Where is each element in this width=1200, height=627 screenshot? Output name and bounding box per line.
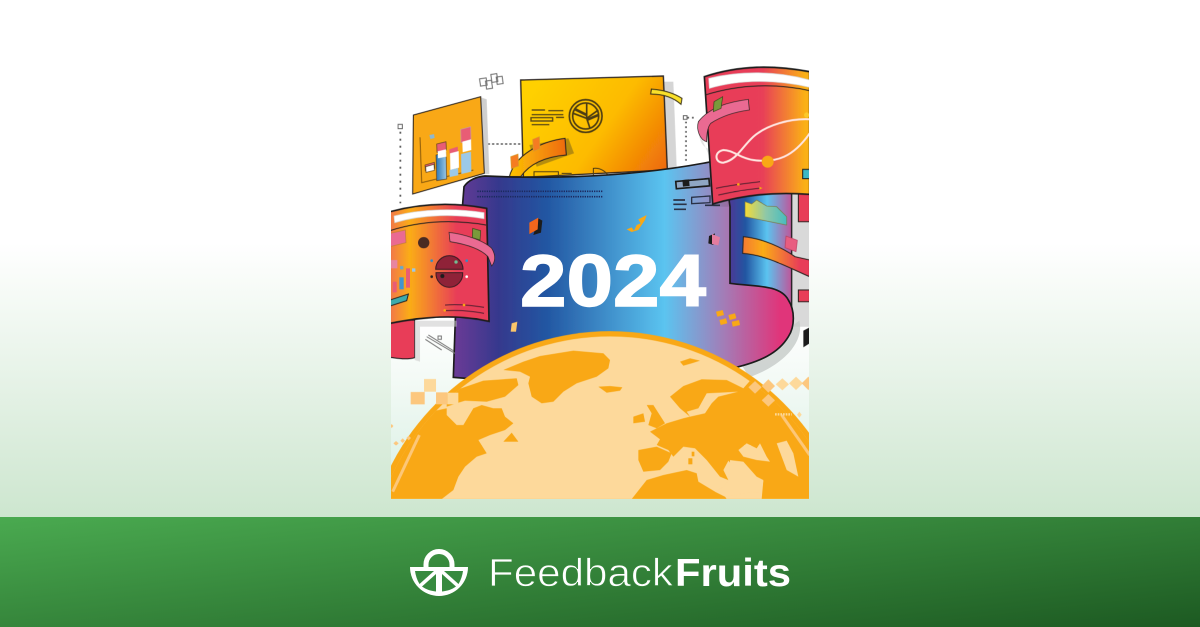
Greenland — [503, 351, 610, 403]
Ireland — [633, 413, 645, 423]
pie chart — [569, 100, 602, 132]
sheet — [390, 204, 489, 323]
panel: right red sheet — [698, 67, 810, 207]
green tag — [713, 97, 723, 112]
pixel squares left — [411, 379, 458, 404]
lines — [445, 305, 484, 313]
icon: dark tile shadow — [708, 233, 715, 245]
icon: orange tile — [533, 218, 542, 235]
footer bar — [0, 517, 1200, 627]
globe ocean — [382, 336, 838, 499]
infinity curve — [716, 119, 810, 163]
green tag — [472, 228, 481, 240]
yellow tab — [651, 89, 682, 104]
slider widget — [676, 179, 710, 189]
Iberia — [638, 447, 672, 472]
pixel diamonds right — [748, 377, 810, 418]
text lines — [531, 110, 564, 125]
Mediterranean islands — [688, 452, 694, 464]
mini bar chart — [391, 260, 415, 292]
logo wordmark: Fruits — [675, 552, 791, 595]
pink band — [698, 99, 749, 142]
icon: dark tile — [803, 327, 810, 347]
rim highlights — [393, 415, 810, 492]
North America — [390, 405, 513, 499]
pink tabs — [390, 230, 406, 247]
icon: gold tile — [511, 322, 517, 332]
Newfoundland — [503, 433, 518, 442]
Great Britain — [647, 405, 665, 428]
ribbon — [743, 237, 810, 277]
panel: main gradient banner — [453, 159, 800, 393]
icon: small squares top — [480, 74, 503, 89]
panel: yellow pie chart sheet — [509, 76, 682, 177]
Eurasia — [650, 373, 813, 499]
icon: checker squares — [716, 310, 740, 327]
icon: pointer annotation — [425, 335, 455, 353]
arc ribbon — [529, 138, 574, 167]
teal tag — [803, 169, 810, 179]
chart dots — [430, 259, 468, 278]
logo icon: fruit basket — [410, 552, 468, 596]
panel: orange bar chart — [413, 97, 489, 194]
panel: left red sheet — [390, 204, 495, 362]
continents — [390, 351, 813, 499]
logo wordmark: Feedback — [488, 552, 674, 595]
icon: gold zigzag — [627, 215, 647, 232]
Svalbard — [680, 358, 700, 366]
text lines right — [673, 200, 720, 209]
small target — [418, 237, 429, 248]
split circle chart — [436, 256, 463, 287]
pixel dots left — [390, 424, 411, 446]
teal tag — [390, 294, 408, 306]
logo wordmark — [488, 552, 791, 595]
globe — [377, 331, 843, 499]
globe rim — [377, 331, 843, 499]
connector dots left — [398, 132, 403, 203]
illustration: 2024 world report cover — [391, 66, 809, 499]
title: 2024: 2024 — [520, 241, 706, 322]
lower tail — [390, 320, 415, 359]
icon: pink tile — [712, 234, 720, 245]
lines with dots — [716, 182, 762, 195]
Arctic Canada — [447, 378, 518, 407]
dotted lines — [477, 191, 603, 197]
Iceland — [598, 386, 622, 393]
seas — [687, 392, 798, 497]
Africa — [632, 470, 727, 499]
panel: inner curl with area chart — [728, 190, 810, 327]
